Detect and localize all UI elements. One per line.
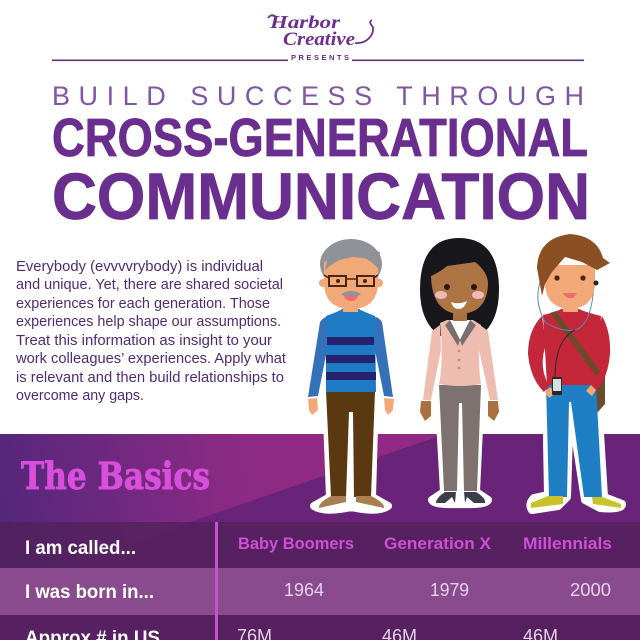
intro paragraph: is relevant and then build relationships to [16,370,284,386]
character: generation x woman [420,238,499,504]
panel: table: I am called... [25,538,136,559]
logo: Harbor Creative: Creative [283,29,356,50]
panel: table [0,522,640,640]
panel: table: Millennials [523,534,612,553]
panel: table: 1964 [284,580,324,600]
character: baby boomer man [308,239,394,510]
panel: table: Generation X [384,534,492,553]
presents divider: PRESENTS [291,53,349,62]
logo: Harbor Creative: Harbor [269,12,341,32]
title: COMMUNICATION [52,159,590,233]
panel: table: 2000 [570,580,611,600]
panel: table: Baby Boomers [238,534,354,553]
heading: The Basics: The Basics [21,454,210,498]
intro paragraph: Everybody (evvvvrybody) is individual [16,259,263,275]
character: millennial [528,234,622,510]
panel: table: 1979 [430,580,469,600]
intro paragraph: experiences for each generation. Those [16,296,270,312]
intro paragraph: and unique. Yet, there are shared societal [16,277,283,293]
title [52,81,590,233]
logo: Harbor Creative [268,12,373,50]
intro paragraph: work colleagues’ experiences. Apply what [15,351,286,367]
intro paragraph: experiences help shape our assumptions. [16,314,281,330]
panel: table: I was born in... [25,582,154,603]
intro paragraph: Treat this information as insight to your [16,333,272,349]
panel: the basics background [0,434,640,640]
intro paragraph [15,259,286,404]
title: BUILD SUCCESS THROUGH [52,81,584,111]
intro paragraph: overcome any gaps. [16,388,144,404]
